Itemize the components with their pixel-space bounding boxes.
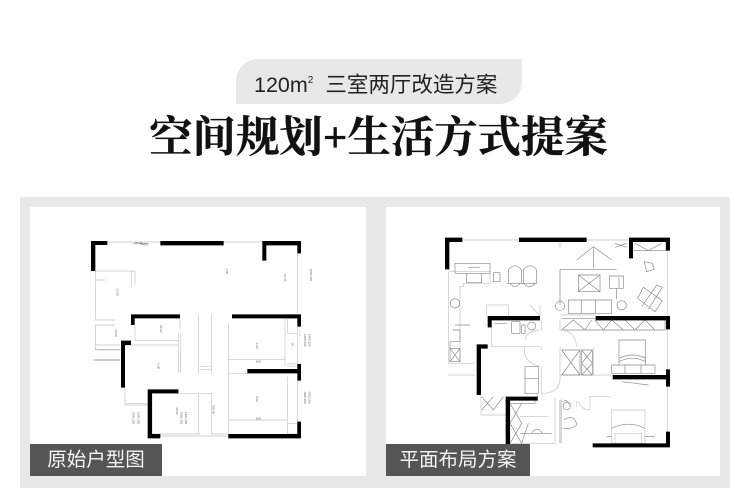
label: original floor plan: 原始户型图 (47, 449, 145, 471)
chart: original floor plan: 2400.300 (307, 334, 311, 347)
chart: original floor plan: 3600.300 (309, 269, 313, 281)
chart: original floor plan: 1800.200 (132, 412, 136, 424)
chart: original floor plan: 26.00 (116, 288, 120, 296)
panel: original floor plan card (30, 207, 366, 476)
chart: original floor plan: 2400.300 (307, 391, 311, 404)
chart: original floor plan: 100.00 (211, 405, 215, 414)
chart: original floor plan: 600 (256, 360, 261, 364)
chart: original floor plan: 2400.300 (184, 412, 188, 424)
subtitle text: 120m2 三室两厅改造方案 (254, 73, 497, 97)
chart: original floor plan: 1800.200 (303, 391, 307, 404)
chart: original floor plan: 6.00 (255, 396, 259, 402)
chart: original floor plan: 20.00 (159, 325, 163, 333)
chart: original floor plan: 2400.300 (136, 412, 140, 424)
chart: original floor plan (91, 241, 313, 438)
main title: 空间规划+生活方式提案 (149, 114, 608, 162)
panel: furnished layout card (386, 207, 720, 476)
label: layout plan (386, 444, 530, 476)
chart: original floor plan: 1800.300 (180, 412, 184, 424)
label: layout plan: 平面布局方案 (399, 449, 516, 471)
chart: original floor plan: 1800.200 (303, 334, 307, 347)
chart: furnished floor plan (445, 238, 670, 450)
chart: original floor plan: 20.00 (114, 329, 118, 337)
chart: original floor plan: 600 (256, 416, 261, 420)
subtitle pill background (236, 59, 522, 104)
label: original floor plan (30, 444, 162, 476)
grey backdrop panel (20, 197, 730, 488)
chart: original floor plan: 20 (291, 343, 295, 346)
chart: original floor plan: 6.00 (255, 343, 259, 349)
chart: original floor plan: 20.00 (283, 274, 287, 282)
chart: original floor plan: 6.00 (156, 363, 160, 369)
chart: original floor plan: 4.80 (225, 268, 229, 274)
chart: original floor plan: 20.00 (175, 407, 179, 415)
